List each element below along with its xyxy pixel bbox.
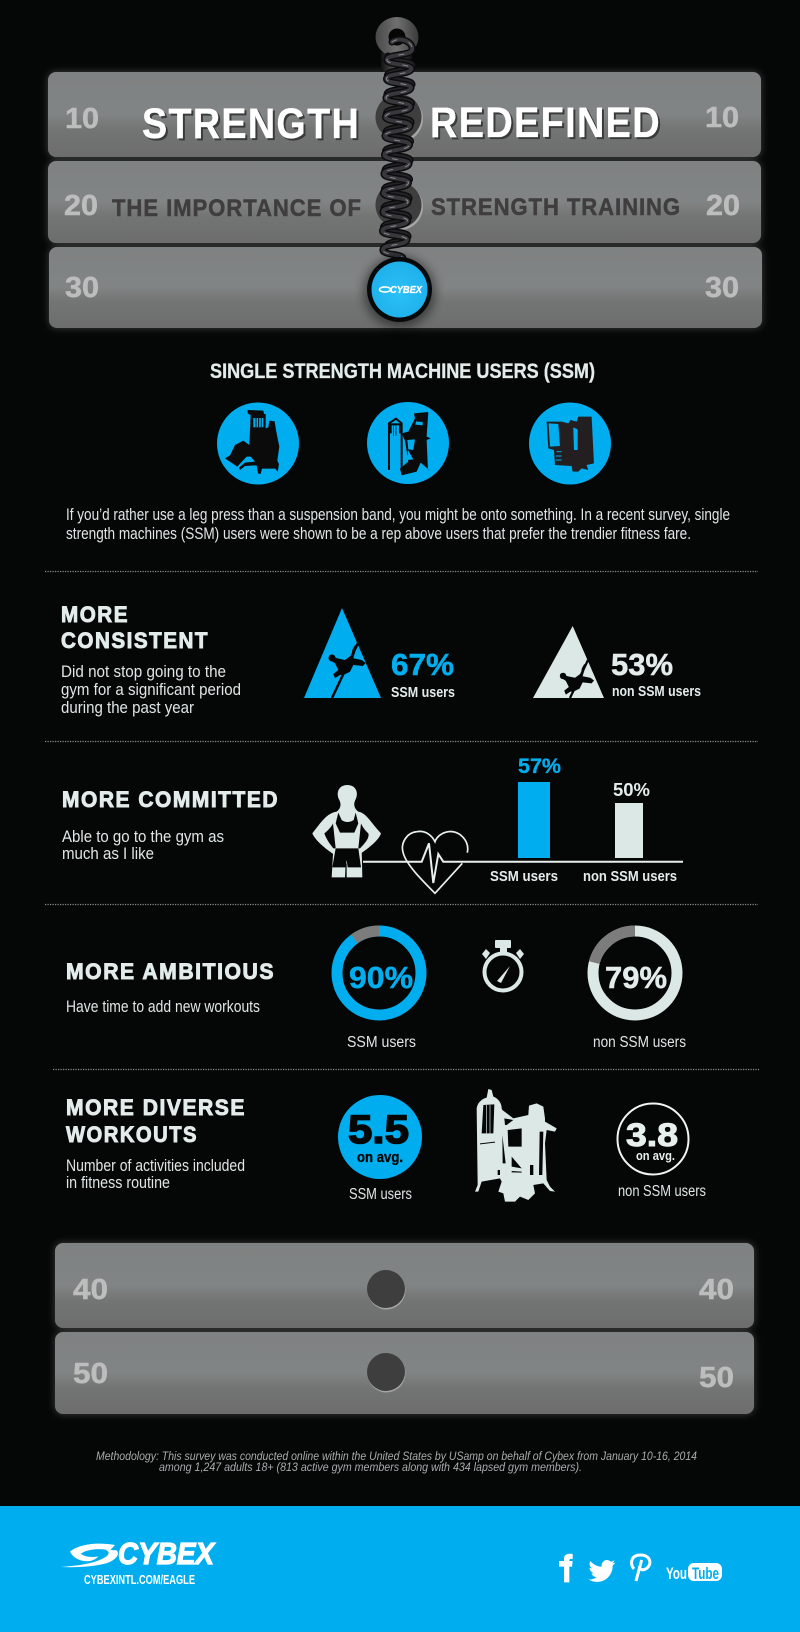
value: 50%: 50% — [613, 779, 650, 800]
heading: more diverse workouts — [66, 1095, 246, 1147]
heading: more consistent — [61, 602, 209, 653]
heading: more consistent: CONSISTENT — [61, 628, 209, 653]
Cybex pin: CYBEX — [390, 285, 423, 296]
methodology note: Methodology: This survey was conducted online within the United States by USamp on behalf of Cybex from January 10-16, 2014 — [96, 1451, 697, 1463]
number labels: 20 — [706, 190, 740, 222]
cable loop — [376, 17, 418, 73]
stack plate glow — [55, 1243, 754, 1414]
label: SSM users: SSM users — [391, 685, 455, 701]
label: non SSM users: non SSM users — [612, 684, 701, 700]
icon: machine 2 — [367, 402, 449, 484]
number labels: 20 — [64, 190, 98, 222]
number labels: 10 — [705, 102, 739, 134]
description: gym for a significant period — [61, 681, 241, 699]
number labels — [73, 1274, 734, 1394]
title: REDEFINED — [430, 99, 661, 147]
description — [61, 663, 241, 717]
heading: more consistent: MORE — [61, 602, 129, 627]
icon: youtube: Tube — [692, 1564, 719, 1583]
description: Did not stop going to the — [61, 663, 226, 681]
title: REDEFINED — [432, 101, 663, 149]
plate 2 hole — [376, 182, 423, 230]
methodology note: among 1,247 adults 18+ (813 active gym members along with 434 lapsed gym members). — [159, 1462, 582, 1474]
section heading: SSM: SINGLE STRENGTH MACHINE USERS (SSM) — [210, 360, 595, 383]
icon: woman — [312, 785, 381, 877]
stat: 67%: 67% — [391, 647, 454, 682]
heading: more ambitious: MORE AMBITIOUS — [66, 959, 275, 984]
number labels: 10 — [65, 103, 99, 135]
value: 79%: 79% — [605, 960, 667, 995]
plate 4 hole — [367, 1270, 406, 1310]
panel: more consistent — [61, 602, 701, 717]
methodology note — [96, 1451, 697, 1474]
number labels: 40 — [73, 1274, 108, 1306]
subtitle: STRENGTH TRAINING — [431, 194, 681, 221]
donut: 90% — [337, 931, 421, 1015]
icon: stopwatch — [482, 940, 524, 990]
badge: 5.5 on avg: 5.5 — [348, 1108, 409, 1152]
label: non SSM users: non SSM users — [593, 1034, 686, 1051]
description: Have time to add new workouts — [66, 998, 260, 1016]
badge: 3.8 on avg — [618, 1104, 688, 1174]
plate 30 — [49, 247, 762, 328]
icon: facebook — [559, 1554, 573, 1582]
title — [142, 99, 663, 150]
logo: Cybex: CYBEX — [118, 1536, 216, 1571]
label: SSM users: SSM users — [490, 869, 558, 885]
label: SSM users: SSM users — [347, 1034, 416, 1051]
subtitle — [112, 194, 681, 222]
panel: more committed — [62, 755, 683, 893]
weight stack top — [48, 17, 762, 328]
number labels — [64, 102, 740, 304]
icon: twitter — [588, 1560, 615, 1582]
bar: SSM users 57% — [518, 782, 550, 858]
icon: blue triangle climber — [304, 608, 381, 698]
icon: machine 1 — [217, 402, 299, 484]
heading: more diverse workouts: WORKOUTS — [66, 1122, 198, 1147]
badge: 3.8 on avg: on avg. — [636, 1149, 675, 1163]
number labels: 30 — [705, 272, 739, 304]
heading: more committed: MORE COMMITTED — [62, 787, 279, 812]
weight stack bottom — [55, 1243, 754, 1414]
icon: youtube — [666, 1563, 722, 1583]
label: SSM users: SSM users — [349, 1186, 412, 1203]
description: in fitness routine — [66, 1174, 170, 1192]
description: Number of activities included — [66, 1157, 245, 1175]
heartbeat line and heart — [363, 831, 683, 893]
badge: 5.5 on avg — [338, 1095, 422, 1179]
badge: 3.8 on avg: 3.8 — [626, 1117, 678, 1153]
title: STRENGTH — [142, 100, 360, 148]
heading: more diverse workouts: MORE DIVERSE — [66, 1095, 246, 1120]
intro paragraph — [66, 506, 730, 543]
badge: 5.5 on avg: on avg. — [357, 1150, 403, 1166]
website: CYBEXINTL.COM/EAGLE — [84, 1572, 195, 1587]
stack plate glow — [48, 72, 762, 328]
subtitle: THE IMPORTANCE OF — [112, 195, 362, 222]
logo: Cybex — [61, 1536, 216, 1571]
description — [62, 828, 224, 863]
panel: more diverse workouts — [66, 1089, 706, 1203]
number labels: 50 — [73, 1358, 108, 1390]
icon: machine silhouette — [475, 1089, 557, 1202]
Cybex pin — [364, 256, 436, 328]
number labels: 50 — [699, 1362, 734, 1394]
description: much as I like — [62, 845, 154, 863]
label: non SSM users: non SSM users — [618, 1183, 706, 1200]
number labels: 30 — [65, 272, 99, 304]
title: STRENGTH — [144, 102, 362, 150]
description: during the past year — [61, 699, 194, 717]
spring cable — [382, 40, 413, 258]
plate 40 — [55, 1243, 754, 1328]
label: non SSM users: non SSM users — [583, 869, 677, 885]
description: Able to go to the gym as — [62, 828, 224, 846]
icon: youtube: You — [666, 1564, 687, 1583]
icon: machine 3 — [529, 402, 611, 484]
footer band — [0, 1506, 800, 1632]
description — [66, 1157, 245, 1192]
number labels: 40 — [699, 1274, 734, 1306]
plate 10 — [48, 72, 761, 157]
icon: light triangle climber — [533, 626, 604, 698]
plate 1 hole — [376, 94, 423, 142]
value: 57%: 57% — [518, 755, 561, 778]
stat: 53%: 53% — [611, 647, 673, 682]
icon: pinterest — [632, 1555, 650, 1581]
value: 90%: 90% — [349, 960, 413, 995]
plate 5 hole — [367, 1353, 406, 1392]
panel: more ambitious — [66, 931, 686, 1051]
bar: non SSM users 50% — [615, 803, 643, 858]
plate 50 — [55, 1332, 754, 1414]
donut: 79% — [593, 931, 677, 1015]
plate 20 — [48, 161, 761, 243]
